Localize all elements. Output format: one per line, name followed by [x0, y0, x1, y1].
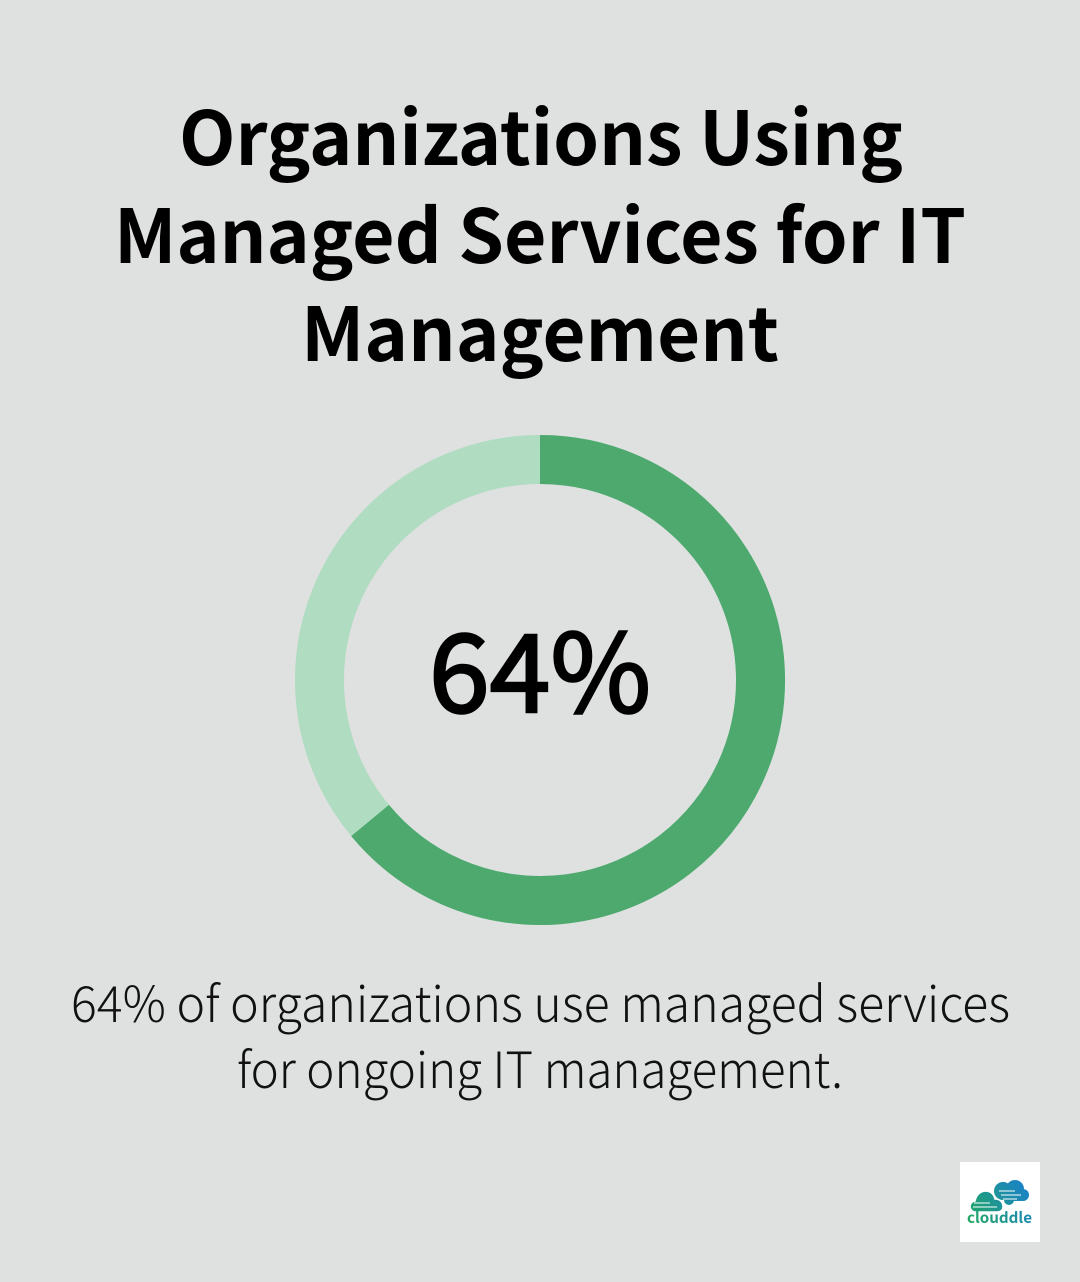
center value: 64%: [429, 588, 651, 744]
donut remainder track: [320, 460, 760, 900]
title: Managed Services for IT: [114, 178, 966, 285]
logo wordmark: clouddle: [967, 1207, 1032, 1228]
description text: [71, 965, 1010, 1103]
icon: left cloud: [970, 1191, 1003, 1212]
description text: for ongoing IT management.: [237, 1031, 843, 1103]
title: [114, 80, 966, 383]
description text: 64% of organizations use managed services: [71, 965, 1010, 1037]
donut value arc: [370, 460, 761, 900]
title: Management: [301, 276, 779, 383]
icon: cloud circuit lines: [973, 1191, 1021, 1207]
icon: right cloud: [994, 1180, 1029, 1205]
logo: clouddle: [960, 1162, 1040, 1242]
title: Organizations Using: [179, 80, 903, 187]
donut chart: 64%: [320, 460, 761, 900]
